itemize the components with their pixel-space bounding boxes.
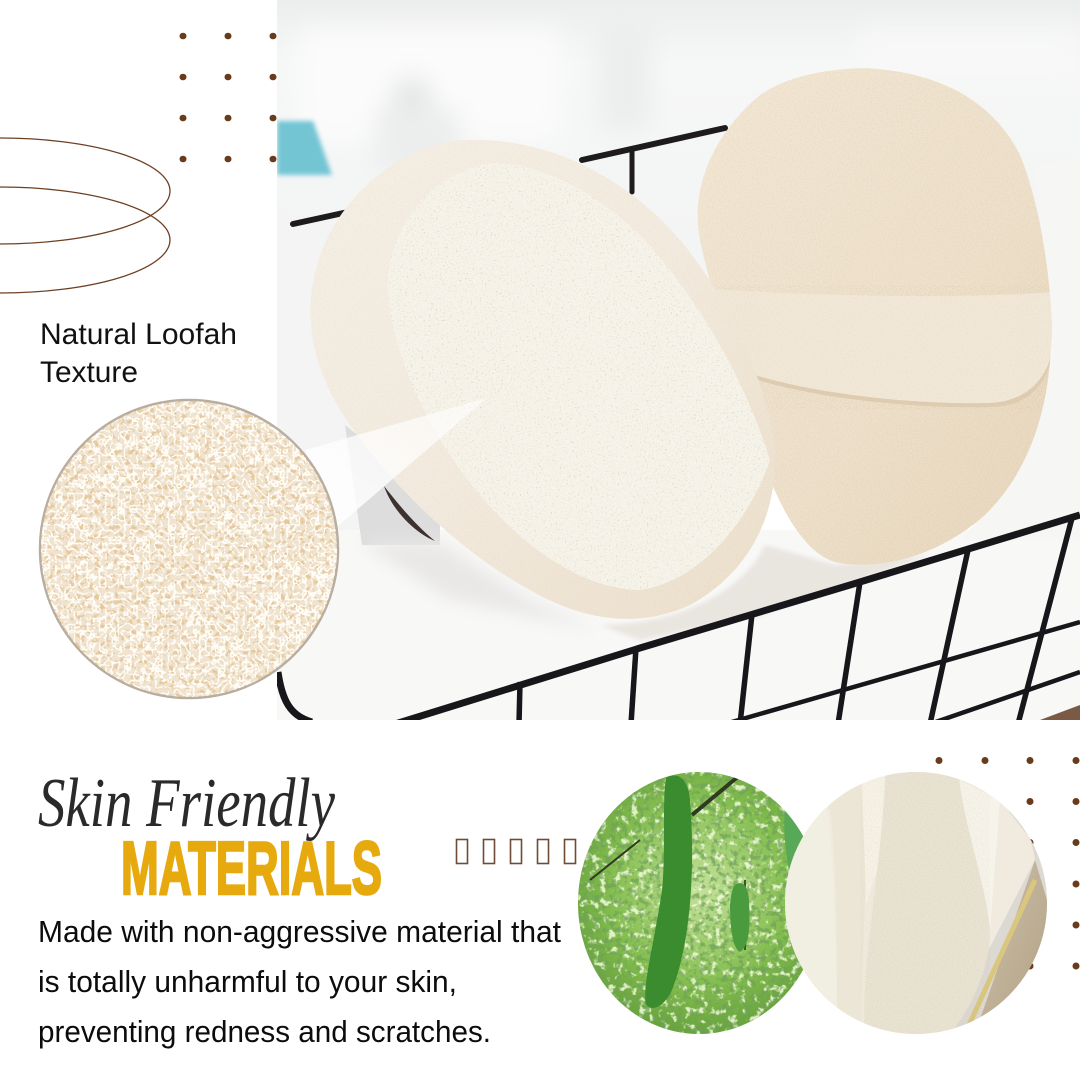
photo circle: loofah gourds on the vine <box>578 772 804 1034</box>
hanging sponge strips <box>785 775 1047 1034</box>
texture label <box>40 318 237 389</box>
photo circle: dried loofah sponges <box>785 772 1047 1034</box>
central loofah column <box>864 772 990 1034</box>
script heading: Skin Friendly <box>38 765 336 842</box>
gold heading: MATERIALS <box>121 826 382 910</box>
body copy: preventing redness and scratches. <box>38 1014 491 1049</box>
body copy <box>38 914 561 1049</box>
body copy: is totally unharmful to your skin, <box>38 964 457 999</box>
upper right gourd <box>784 811 804 870</box>
dark shadow sliver under pad <box>384 486 435 541</box>
elastic band <box>718 290 1052 408</box>
front basket wires <box>278 515 1080 724</box>
foliage <box>578 772 802 1034</box>
decorative interlocked rings <box>0 138 170 293</box>
texture label: Natural Loofah <box>40 318 237 351</box>
loofah close-up circle <box>40 400 340 700</box>
decorative dot grid, top <box>180 33 276 162</box>
branches <box>590 775 745 950</box>
smaller gourd <box>730 883 749 952</box>
towels <box>277 320 1080 720</box>
large gourd <box>645 776 692 1008</box>
texture label: Texture <box>40 356 138 389</box>
left loofah pad <box>300 130 790 630</box>
row of empty placeholder glyph boxes <box>456 840 576 864</box>
zoom callout beam <box>305 398 487 526</box>
pad texture <box>690 60 1060 570</box>
teal object in background <box>277 121 332 175</box>
decorative dot grid, bottom right <box>936 757 1080 970</box>
right loofah pad <box>690 60 1060 570</box>
product photo: loofah pads in a wire basket <box>277 0 1080 724</box>
exposed loofah face <box>380 155 775 595</box>
body copy: Made with non-aggressive material that <box>38 914 561 949</box>
rear basket rail <box>293 128 725 224</box>
blurred room background <box>277 0 1080 280</box>
